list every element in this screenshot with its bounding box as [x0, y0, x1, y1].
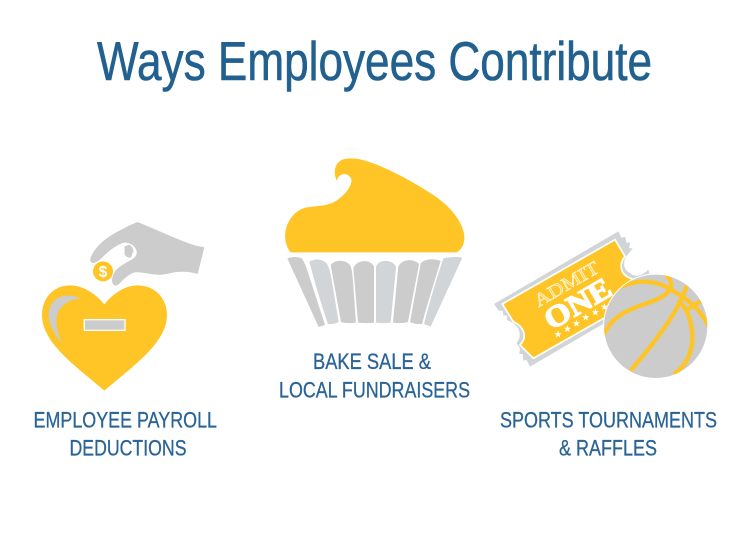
stars: ★ [572, 318, 581, 328]
seam right arc [674, 300, 692, 374]
wrapper pleat 5 [376, 261, 396, 323]
label: employee payroll: EMPLOYEE PAYROLL [34, 408, 217, 433]
ticket outer edge [494, 231, 654, 367]
heart highlight [49, 296, 80, 343]
label: deductions: DEDUCTIONS [70, 436, 186, 461]
wrapper pleat 6 [393, 260, 419, 323]
stars: ★ [591, 307, 600, 317]
seam top arc [622, 282, 710, 328]
seam long diagonal [631, 286, 687, 371]
stars: ★ [563, 324, 572, 334]
ticket yellow body [502, 240, 646, 358]
wrapper pleat 3 [331, 261, 356, 323]
coin slot [84, 320, 125, 330]
stars [554, 302, 609, 339]
stars: ★ [554, 329, 562, 339]
panel: employee payroll deductions [34, 222, 217, 461]
admit text: ADMIT [530, 257, 603, 312]
one text: ONE [538, 272, 617, 336]
seam cross [687, 301, 702, 309]
hand [90, 222, 204, 285]
coin [93, 261, 113, 281]
stars: ★ [600, 302, 609, 312]
wrapper pleat 2 [309, 259, 339, 324]
icon: heart [42, 285, 167, 391]
stars: ★ [581, 313, 590, 323]
wrapper pleat 1 [287, 257, 325, 327]
icon: cupcake [285, 158, 464, 327]
icon: hand with coin [90, 222, 204, 285]
panel: sports tournaments and raffles [494, 231, 717, 461]
icon: basketball [603, 273, 710, 379]
wrapper pleat 8 [424, 257, 462, 327]
icon: ticket [494, 231, 654, 367]
seam left arc [603, 273, 671, 335]
fingertip [124, 245, 133, 258]
dollar sign: $ [99, 264, 108, 281]
icon: heart piggy bank [42, 285, 167, 391]
wrapper pleat 7 [410, 259, 441, 324]
label: and raffles: & RAFFLES [559, 436, 657, 461]
wrapper pleat 4 [353, 261, 374, 323]
panel: bake sale [279, 158, 470, 403]
label: local fundraisers: LOCAL FUNDRAISERS [279, 378, 470, 403]
label: bake sale: BAKE SALE & [313, 349, 431, 374]
cupcake frosting [285, 158, 464, 252]
